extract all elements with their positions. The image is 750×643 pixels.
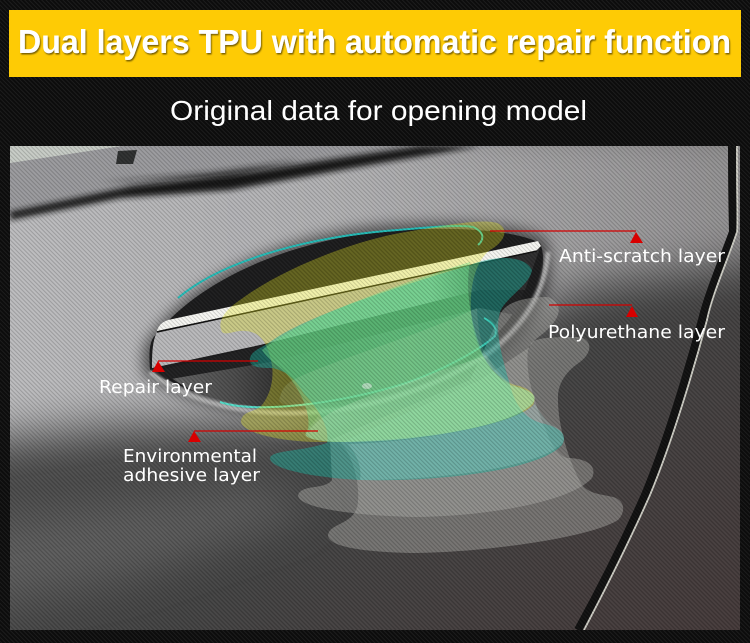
pale green band lower	[305, 355, 535, 442]
lower recess interior	[165, 305, 515, 406]
upper window and trim	[10, 146, 520, 220]
callout: repair layer	[99, 361, 258, 398]
yellow layer	[220, 221, 534, 442]
title banner: Dual layers TPU with automatic repair function	[18, 23, 731, 60]
callout: environmental adhesive layer: adhesive layer	[123, 465, 261, 486]
callout: environmental adhesive layer	[123, 431, 318, 486]
cyan rim	[178, 226, 482, 298]
handle body	[152, 248, 540, 368]
pale green band upper	[279, 308, 534, 442]
subtitle: Original data for opening model	[170, 95, 587, 126]
texture overlay	[10, 146, 740, 630]
title banner	[9, 10, 741, 77]
door handle recess	[143, 223, 550, 413]
teal layer	[250, 258, 564, 480]
callout: polyurethane layer	[548, 305, 726, 343]
callout: polyurethane layer: Polyurethane layer	[548, 322, 726, 343]
callout: anti-scratch layer	[490, 231, 726, 267]
callout: repair layer: Repair layer	[99, 377, 213, 398]
green layer	[262, 262, 534, 442]
gray layer 1	[298, 297, 593, 517]
door edge seam	[578, 146, 737, 630]
recess outer rim	[150, 252, 548, 413]
gray layer 2 (bottom)	[328, 337, 623, 553]
dark band under handle	[152, 305, 515, 380]
chrome strip	[157, 241, 541, 331]
teal lower tint	[348, 404, 564, 480]
door photo panel	[0, 120, 750, 630]
callout: anti-scratch layer: Anti-scratch layer	[559, 246, 726, 267]
car door body	[10, 242, 740, 630]
callout: environmental adhesive layer: Environmental	[123, 446, 257, 467]
small droplet	[362, 383, 372, 389]
